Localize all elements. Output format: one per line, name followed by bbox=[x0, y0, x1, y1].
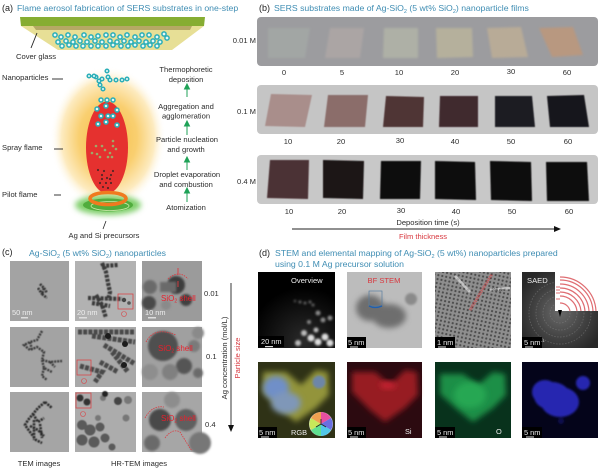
photo row: 0.1 M: 0.1 M bbox=[237, 107, 256, 116]
HR-TEM detail 0.01 with SiO2 shell: shell bbox=[177, 294, 196, 303]
process steps with green arrows bbox=[154, 65, 220, 212]
deposition time tick labels: 30 bbox=[396, 136, 404, 145]
image: HR lattice bbox=[435, 272, 511, 348]
image: overview bbox=[258, 272, 335, 348]
process steps with green arrows: Droplet evaporation bbox=[154, 170, 220, 179]
labels: flame regions: Pilot flame bbox=[2, 190, 37, 199]
heading: panel d: using 0.1 M Ag precursor solution bbox=[275, 259, 404, 269]
heading: panel c: 2 bbox=[57, 254, 60, 260]
deposition time tick labels: 0 bbox=[282, 68, 286, 77]
deposition time tick labels: 50 bbox=[508, 207, 516, 216]
process steps with green arrows: Thermophoretic bbox=[159, 65, 213, 74]
map: Si: Si bbox=[405, 427, 412, 436]
deposition time tick labels: 50 bbox=[507, 137, 515, 146]
process steps with green arrows: and combustion bbox=[159, 180, 213, 189]
map: O: O bbox=[496, 427, 502, 436]
axis label: Ag concentration: Ag concentration (mol/L) bbox=[220, 316, 229, 399]
TEM image 0.01: 50 nm bbox=[12, 308, 33, 317]
heading: panel b: (5 wt% SiO bbox=[407, 3, 453, 13]
HR-TEM detail 0.4 with SiO2 shell bbox=[142, 392, 211, 454]
HR-TEM detail 0.1 with SiO2 shell: SiO bbox=[158, 344, 171, 353]
label: film thickness: Film thickness bbox=[399, 232, 447, 241]
heading: panel b: 2 bbox=[453, 9, 456, 15]
photo row: 0.4 M: 0.4 M bbox=[237, 177, 256, 186]
diagram: cover glass with deposited nanoparticles: Cover glass bbox=[16, 52, 56, 61]
deposition time tick labels: 20 bbox=[337, 137, 345, 146]
HR-TEM detail 0.1 with SiO2 shell bbox=[142, 327, 204, 387]
caption: HR-TEM images: HR-TEM images bbox=[111, 459, 167, 468]
process steps with green arrows: agglomeration bbox=[162, 112, 210, 120]
labels: flame regions bbox=[2, 73, 63, 199]
deposition time tick labels: 10 bbox=[395, 68, 403, 77]
panel: (b) SERS substrates photos bbox=[233, 3, 598, 241]
arrow: Ag concentration bbox=[228, 283, 234, 432]
heading: panel c: (5 wt% SiO bbox=[60, 248, 106, 258]
image: SAED pattern with indexed rings: SAED bbox=[527, 276, 548, 285]
HR-TEM detail 0.01 with SiO2 shell bbox=[142, 261, 202, 321]
image: HR lattice: 0.236 nm bbox=[488, 287, 505, 292]
heading: panel c: (c) bbox=[2, 247, 12, 257]
heading: panel a: (a) bbox=[2, 3, 13, 13]
labels: flame regions: Nanoparticles bbox=[2, 73, 49, 82]
process steps with green arrows: Atomization bbox=[166, 203, 206, 212]
deposition time tick labels: 10 bbox=[284, 137, 292, 146]
image: HR lattice: 1 nm bbox=[437, 338, 453, 347]
image: BF STEM: 5 nm bbox=[348, 338, 364, 347]
HR-TEM image 0.01 bbox=[75, 261, 136, 321]
heading: panel d: (5 wt%) nanoparticles prepared bbox=[435, 248, 558, 258]
map: O: 5 nm bbox=[437, 428, 453, 437]
HR-TEM detail 0.01 with SiO2 shell: SiO bbox=[161, 294, 174, 303]
HR-TEM image 0.1 bbox=[75, 327, 136, 387]
deposition time tick labels: 60 bbox=[564, 137, 572, 146]
deposition time tick labels: 5 bbox=[340, 68, 344, 77]
heading: panel a: Flame aerosol fabrication of SERS substrates in one-step bbox=[17, 3, 238, 13]
arrow: film thickness bbox=[292, 226, 561, 232]
labels: flame regions: Spray flame bbox=[2, 143, 43, 152]
HR-TEM detail 0.1 with SiO2 shell: shell bbox=[174, 344, 193, 353]
deposition time tick labels: 40 bbox=[451, 137, 459, 146]
image: overview: Overview bbox=[291, 276, 323, 285]
map: Si: 5 nm bbox=[348, 428, 364, 437]
diagram: cover glass with deposited nanoparticles bbox=[16, 17, 205, 61]
map: RGB overlay bbox=[258, 362, 335, 438]
deposition time tick labels: 20 bbox=[451, 68, 459, 77]
deposition time tick labels bbox=[282, 67, 573, 216]
HR-TEM image 0.01: 20 nm bbox=[77, 308, 98, 317]
photo row: 0.4 M bbox=[237, 155, 598, 204]
photo row: 0.01 M: 0.01 M bbox=[233, 36, 256, 45]
map: Ag: 5 nm bbox=[524, 428, 540, 437]
deposition time tick labels: 40 bbox=[452, 207, 460, 216]
deposition time tick labels: 10 bbox=[285, 207, 293, 216]
map: Si bbox=[347, 362, 422, 438]
heading: panel b: SERS substrates made of Ag-SiO bbox=[274, 3, 404, 13]
deposition time tick labels: 30 bbox=[397, 206, 405, 215]
process steps with green arrows: Particle nucleation bbox=[156, 135, 218, 144]
concentration values: 0.01 bbox=[204, 289, 219, 298]
TEM image 0.1 bbox=[10, 327, 69, 387]
image: SAED pattern with indexed rings bbox=[522, 272, 598, 348]
deposition time tick labels: 60 bbox=[563, 68, 571, 77]
panel: (c) TEM images bbox=[2, 247, 242, 468]
deposition time tick labels: 20 bbox=[338, 207, 346, 216]
image: BF STEM bbox=[347, 272, 422, 348]
map: O bbox=[435, 362, 511, 438]
HR-TEM detail 0.4 with SiO2 shell: SiO bbox=[161, 414, 174, 423]
TEM image 0.4 bbox=[10, 392, 69, 452]
heading: panel d: (d) bbox=[259, 248, 270, 258]
process steps with green arrows: and growth bbox=[167, 145, 205, 154]
heading: panel d: STEM and elemental mapping of Ag-SiO bbox=[275, 248, 431, 258]
HR-TEM image 0.4 bbox=[75, 391, 136, 452]
panel: (a) flame aerosol fabrication bbox=[2, 3, 238, 240]
photo row: 0.01 M bbox=[233, 17, 598, 66]
TEM image 0.01 bbox=[10, 261, 69, 321]
HR-TEM detail 0.01 with SiO2 shell: 2 bbox=[174, 298, 177, 304]
concentration values bbox=[204, 289, 219, 429]
nanoparticle cluster above flame bbox=[87, 69, 129, 127]
heading: panel c bbox=[2, 247, 167, 260]
HR-TEM detail 0.4 with SiO2 shell: shell bbox=[177, 414, 196, 423]
deposition time tick labels: 60 bbox=[565, 207, 573, 216]
panel: (d) STEM and elemental mapping bbox=[258, 248, 598, 438]
photo row: 0.1 M bbox=[237, 85, 598, 134]
axis label: deposition time: Deposition time (s) bbox=[396, 218, 460, 227]
HR-TEM detail 0.4 with SiO2 shell: 2 bbox=[174, 418, 177, 424]
map: Ag bbox=[522, 362, 598, 438]
growing particles inside flame bbox=[91, 140, 117, 158]
heading: panel b: 2 bbox=[404, 9, 407, 15]
heading: panel c: Ag-SiO bbox=[29, 248, 57, 258]
heading: panel d bbox=[259, 248, 558, 269]
concentration values: 0.1 bbox=[206, 352, 217, 361]
droplets inside flame bbox=[97, 169, 114, 189]
axis label: particle size: Particle size bbox=[233, 338, 242, 378]
diagram: spray flame bbox=[50, 66, 166, 240]
process steps with green arrows: deposition bbox=[169, 75, 203, 84]
HR-TEM detail 0.1 with SiO2 shell: 2 bbox=[171, 348, 174, 354]
icon: colour wheel bbox=[309, 412, 333, 436]
image: SAED pattern with indexed rings: 5 nm bbox=[524, 338, 540, 347]
HR-TEM detail 0.01 with SiO2 shell: 10 nm bbox=[145, 308, 166, 317]
deposition time tick labels: 30 bbox=[507, 67, 515, 76]
image: overview: 20 nm bbox=[261, 337, 282, 346]
heading: panel c: 2 bbox=[106, 254, 109, 260]
heading: panel b bbox=[259, 3, 529, 15]
heading: panel d: 2 bbox=[431, 254, 435, 260]
image: SAED pattern with indexed rings: -1 bbox=[541, 338, 545, 343]
heading: panel b: (b) bbox=[259, 3, 270, 13]
process steps with green arrows: Aggregation and bbox=[158, 102, 214, 111]
heading: panel c: ) nanoparticles bbox=[109, 248, 167, 258]
heading: panel b: ) nanoparticle films bbox=[456, 3, 529, 13]
caption: TEM images: TEM images bbox=[18, 459, 61, 468]
image: BF STEM: BF STEM bbox=[368, 276, 400, 285]
map: RGB overlay: 5 nm bbox=[259, 428, 275, 437]
diagram: spray flame: Ag and Si precursors bbox=[69, 231, 140, 240]
concentration values: 0.4 bbox=[205, 420, 216, 429]
map: RGB overlay: RGB bbox=[291, 428, 307, 437]
